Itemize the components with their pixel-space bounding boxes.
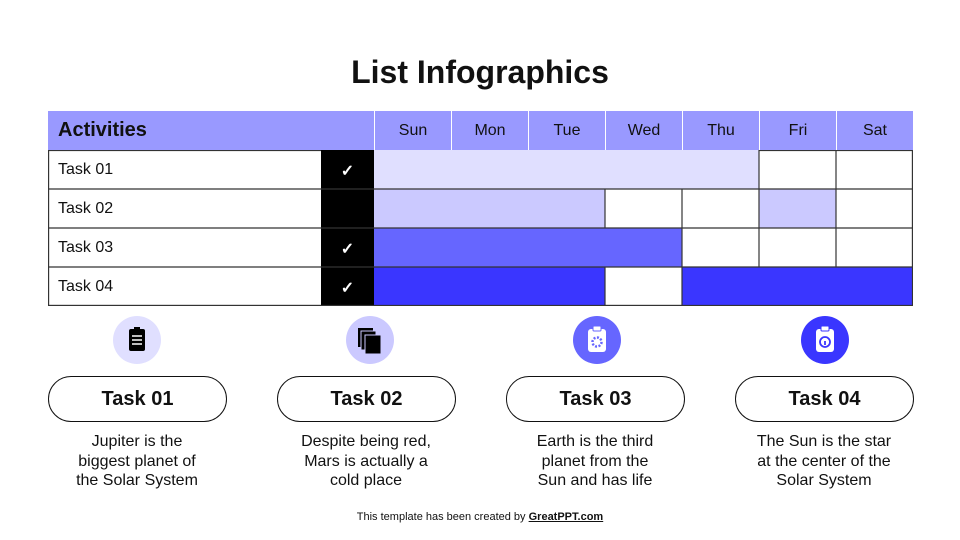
text: Task 01: the Solar System [76, 472, 198, 489]
text: Task 02 [301, 433, 431, 489]
text: Task 04: Solar System [776, 472, 872, 489]
text: ✓ [341, 241, 354, 258]
title: List Infographics [351, 54, 609, 90]
text: Task 04: The Sun is the star [757, 433, 891, 450]
text: ✓ [341, 280, 354, 297]
icon: clipboard info [801, 316, 849, 364]
text: Tue [554, 122, 580, 139]
text: Task 02 [58, 200, 113, 217]
pill: Task 04: Task 04 [789, 388, 860, 410]
text: Task 02: cold place [330, 472, 402, 489]
text: Task 04 [58, 278, 113, 295]
pill: Task 01: Task 01 [102, 388, 173, 410]
text: Task 03: Sun and has life [538, 472, 652, 489]
text: Task 02: Mars is actually a [304, 452, 428, 470]
text: Sat [863, 122, 887, 139]
icon: documents [346, 316, 394, 364]
text: Task 01: Jupiter is the [92, 433, 182, 450]
text: Task 03 [58, 239, 113, 256]
grid [48, 150, 913, 306]
text: Task 01: biggest planet of [78, 452, 196, 470]
pill: Task 03: Task 03 [560, 388, 631, 410]
text: Task 02: Despite being red, [301, 433, 431, 450]
text: Sun [399, 122, 427, 139]
text: Task 03: planet from the [542, 452, 648, 470]
text: Task 04: at the center of the [757, 452, 891, 470]
icon: clipboard gear [573, 316, 621, 364]
pill: Task 01 [48, 376, 227, 422]
text: Thu [707, 122, 735, 139]
text: Mon [474, 122, 506, 139]
text: Task 04 [757, 433, 891, 489]
icon: clipboard list [113, 316, 161, 364]
table header [48, 111, 913, 150]
pill: Task 03 [506, 376, 685, 422]
text: Task 03 [537, 433, 653, 489]
pill: Task 02 [277, 376, 456, 422]
pill: Task 02: Task 02 [331, 388, 402, 410]
text: Fri [789, 122, 807, 139]
text: Task 03: Earth is the third [537, 433, 653, 450]
footer: This template has been created by GreatPPT.com [357, 511, 603, 523]
text: Task 01 [58, 161, 113, 178]
text: Wed [628, 122, 660, 139]
text: ✓ [341, 163, 354, 180]
text: Task 01 [76, 433, 198, 489]
text: Activities [58, 119, 147, 141]
pill: Task 04 [735, 376, 914, 422]
